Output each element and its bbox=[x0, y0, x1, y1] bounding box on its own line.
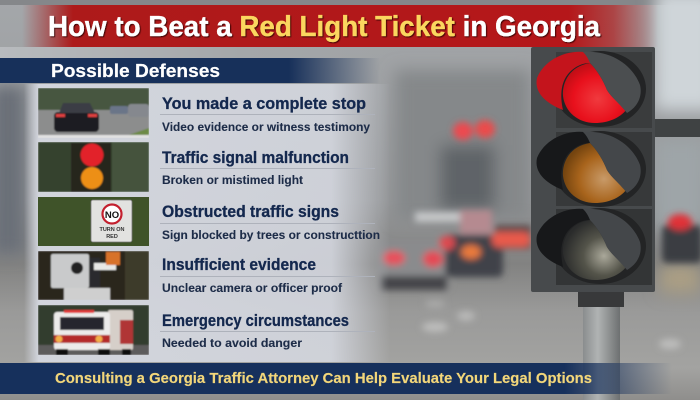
defense 2: signal malfunction bbox=[38, 142, 375, 192]
section heading: Possible Defenses: Possible Defenses bbox=[51, 61, 220, 81]
defense 4: insufficient evidence: Insufficient evidence bbox=[162, 256, 316, 274]
defense 1: complete stop: You made a complete stop bbox=[162, 95, 366, 113]
traffic light pole bbox=[578, 119, 700, 400]
bottom banner bbox=[0, 363, 672, 394]
defense 3: obstructed signs bbox=[38, 197, 380, 246]
defense 5: emergency circumstances: Needed to avoid danger bbox=[162, 336, 302, 350]
section heading: Possible Defenses bbox=[0, 58, 380, 83]
defense 4: insufficient evidence: Unclear camera or officer proof bbox=[162, 281, 343, 295]
photo: no turn on red sign: RED bbox=[106, 234, 118, 240]
defense 3: obstructed signs: Sign blocked by trees or constructtion bbox=[162, 228, 380, 242]
lamp: amber bbox=[537, 131, 646, 207]
photo: no turn on red sign: NO bbox=[105, 210, 119, 221]
title banner bbox=[22, 5, 658, 47]
defense 3: obstructed signs: Obstructed traffic signs bbox=[162, 203, 339, 221]
defense 2: signal malfunction: Broken or mistimed light bbox=[162, 173, 303, 187]
defense 2: signal malfunction: Traffic signal malfunction bbox=[162, 149, 349, 167]
defense 1: complete stop bbox=[38, 88, 375, 138]
photo: no turn on red sign bbox=[38, 197, 149, 246]
panel: defenses backing bbox=[24, 84, 390, 362]
photo: no turn on red sign: TURN ON bbox=[99, 227, 125, 233]
bottom banner: Consulting a Georgia Traffic Attorney Can Help Evaluate Your Legal Options bbox=[55, 370, 592, 387]
photo: red light camera bbox=[38, 251, 149, 300]
title banner: How to Beat a Red Light Ticket in Georgia bbox=[48, 11, 601, 43]
defense 4: insufficient evidence bbox=[38, 251, 375, 300]
defense 5: emergency circumstances bbox=[38, 305, 375, 355]
traffic light housing bbox=[531, 47, 655, 292]
lamp: green (unlit) bbox=[537, 208, 646, 284]
photo: ambulance bbox=[38, 305, 149, 355]
photo: car stopped at intersection bbox=[38, 88, 149, 138]
defense 1: complete stop: Video evidence or witness testimony bbox=[162, 120, 370, 134]
photo: traffic signal bbox=[38, 142, 149, 192]
lamp: red bbox=[537, 51, 646, 127]
defense 5: emergency circumstances: Emergency circumstances bbox=[162, 312, 349, 330]
